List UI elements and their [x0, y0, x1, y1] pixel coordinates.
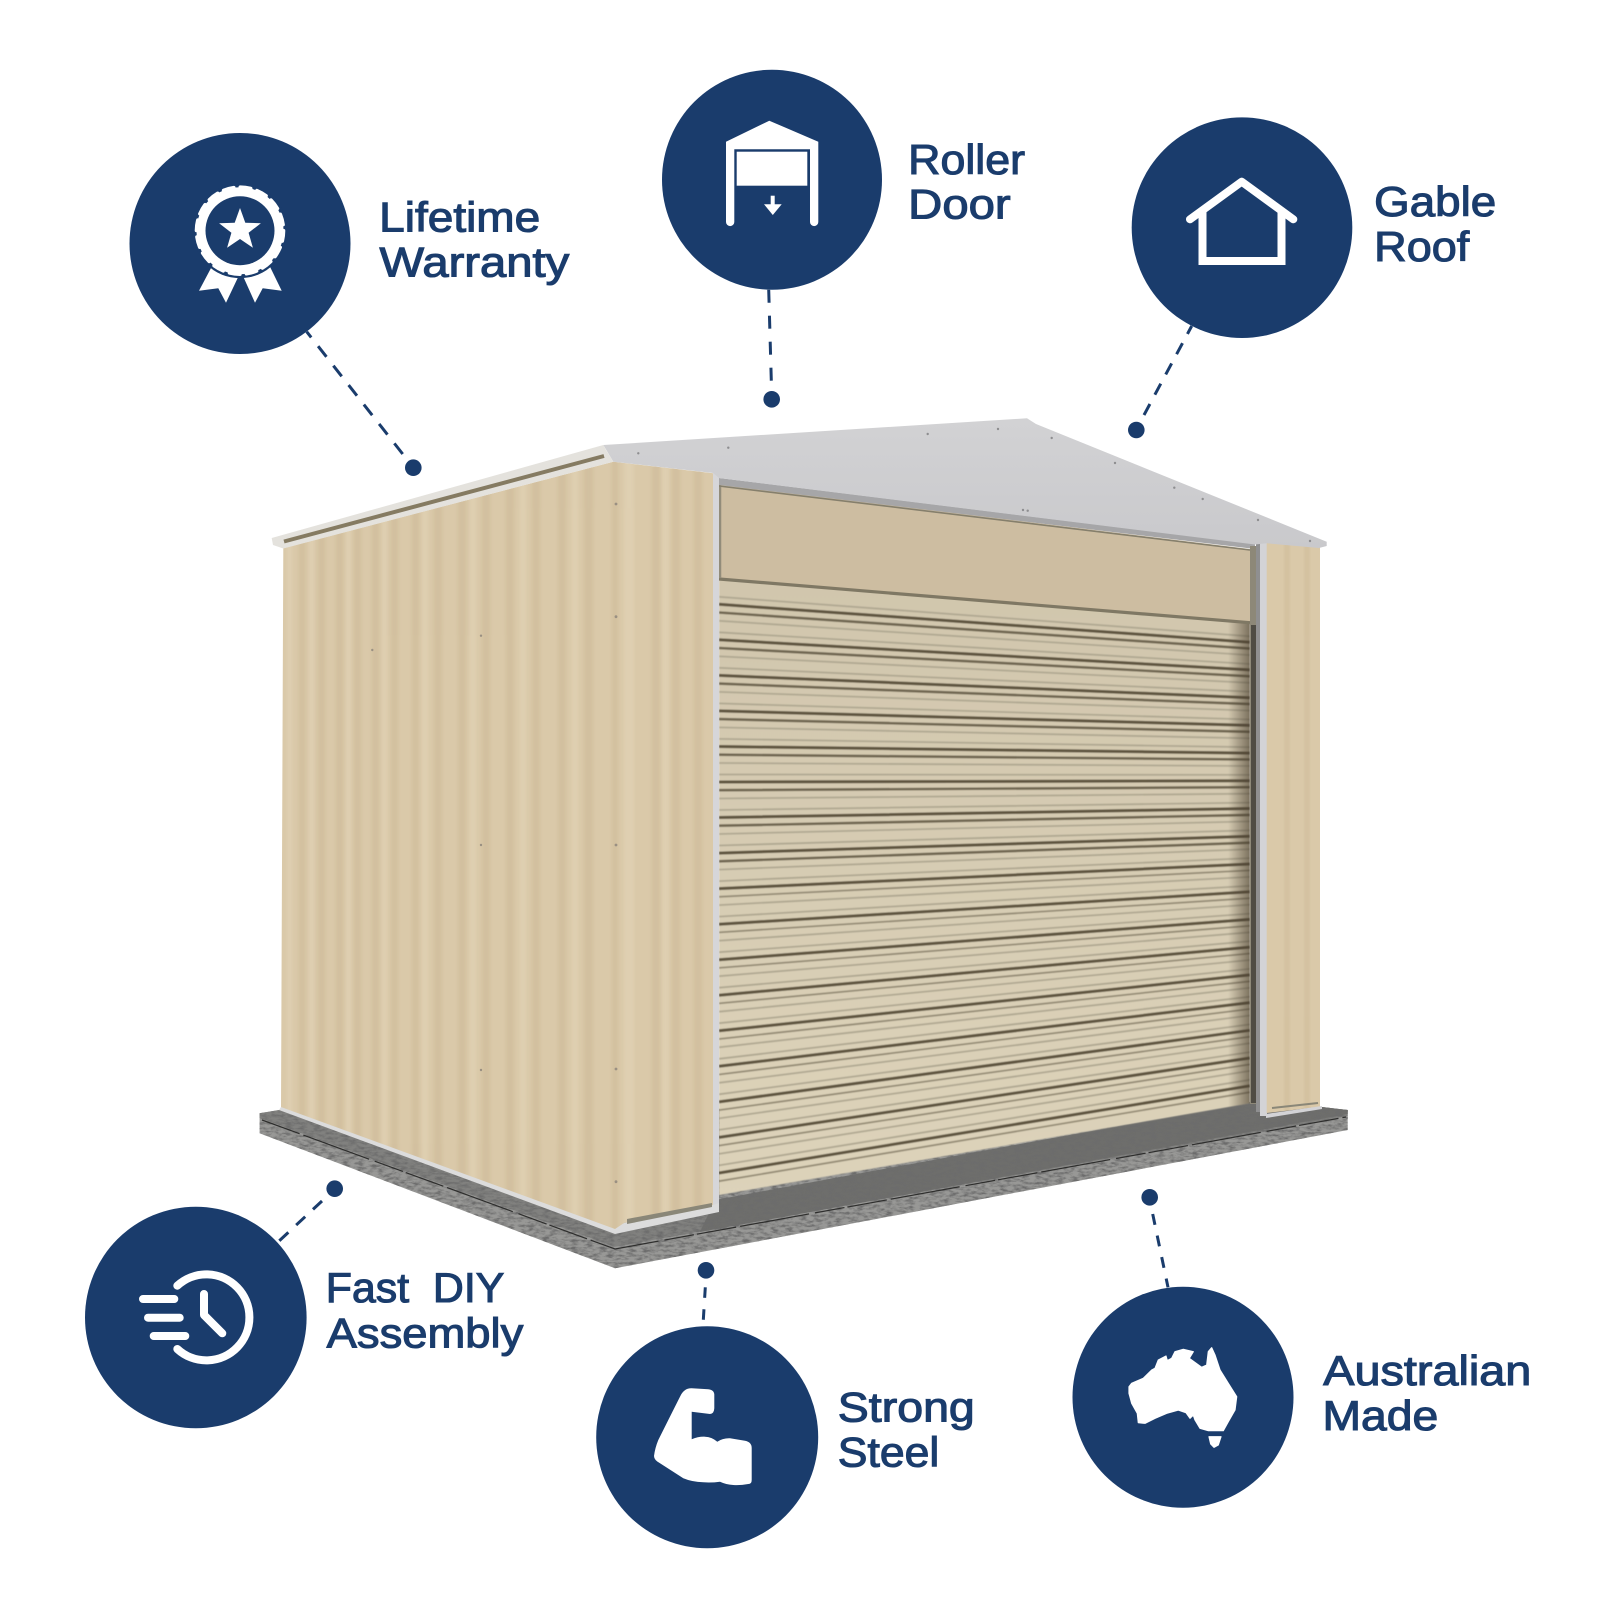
anchor dot: assembly — [326, 1180, 343, 1197]
dashed connector: assembly — [278, 1201, 322, 1242]
icon: map of australia — [1129, 1348, 1237, 1447]
anchor dot: door — [763, 391, 780, 408]
label: roller door — [908, 136, 1025, 227]
dashed connector: door — [769, 289, 771, 381]
label: lifetime warranty: Lifetime — [379, 194, 540, 241]
dashed connector: steel — [703, 1287, 705, 1320]
callout: gable roof — [1128, 117, 1496, 438]
left side wall — [281, 450, 715, 1250]
left roof eave gutter — [272, 445, 613, 548]
callout: australian made — [1072, 1189, 1531, 1508]
dashed connector: warranty — [307, 332, 403, 454]
label: lifetime warranty: Warranty — [380, 239, 569, 286]
roller door slats — [719, 578, 1250, 1195]
icon: garage with roller door — [726, 121, 818, 226]
anchor dot: roof — [1128, 422, 1145, 438]
base trim — [279, 1107, 719, 1234]
label: roller door: Door — [908, 180, 1011, 227]
corner pillar trim — [713, 472, 719, 1212]
roof — [603, 418, 1327, 548]
label: australian made: Made — [1322, 1392, 1438, 1439]
label: strong steel — [838, 1384, 975, 1476]
label: gable roof — [1374, 178, 1496, 270]
label: strong steel: Steel — [838, 1429, 939, 1476]
badge circle: door — [662, 70, 882, 290]
anchor dot: warranty — [405, 459, 422, 476]
callout: strong steel — [596, 1262, 975, 1548]
callout: fast diy assembly — [85, 1180, 523, 1428]
dashed connector: australian — [1153, 1214, 1168, 1287]
badge circle: australian — [1072, 1287, 1294, 1508]
label: australian made — [1322, 1347, 1531, 1439]
label: lifetime warranty — [379, 194, 569, 286]
dashed connector: roof — [1144, 326, 1192, 415]
badge circle: roof — [1132, 117, 1352, 338]
callout: roller door — [662, 70, 1025, 408]
icon: house — [1190, 182, 1293, 261]
door side track — [1250, 543, 1267, 1116]
wall screws — [371, 503, 617, 1183]
label: gable roof: Gable — [1374, 178, 1496, 225]
right side wall panel — [1266, 540, 1322, 1118]
callout: lifetime warranty — [130, 133, 569, 476]
shed illustration — [260, 418, 1348, 1268]
door header panel — [719, 478, 1255, 623]
anchor dot: australian — [1141, 1189, 1158, 1206]
label: strong steel: Strong — [838, 1384, 975, 1431]
icon: fast clock — [143, 1274, 249, 1360]
label: fast diy assembly: Fast DIY — [326, 1264, 504, 1311]
icon: award rosette — [192, 183, 288, 303]
badge circle: assembly — [85, 1207, 307, 1428]
label: fast diy assembly: Assembly — [327, 1309, 523, 1356]
badge circle: warranty — [130, 133, 350, 354]
label: roller door: Roller — [908, 136, 1025, 183]
icon: flexed arm — [654, 1388, 752, 1485]
label: gable roof: Roof — [1374, 223, 1470, 270]
anchor dot: steel — [698, 1262, 714, 1279]
label: australian made: Australian — [1323, 1347, 1531, 1394]
badge circle: steel — [596, 1326, 818, 1548]
label: fast diy assembly — [326, 1264, 523, 1356]
concrete slab — [260, 1100, 1348, 1268]
